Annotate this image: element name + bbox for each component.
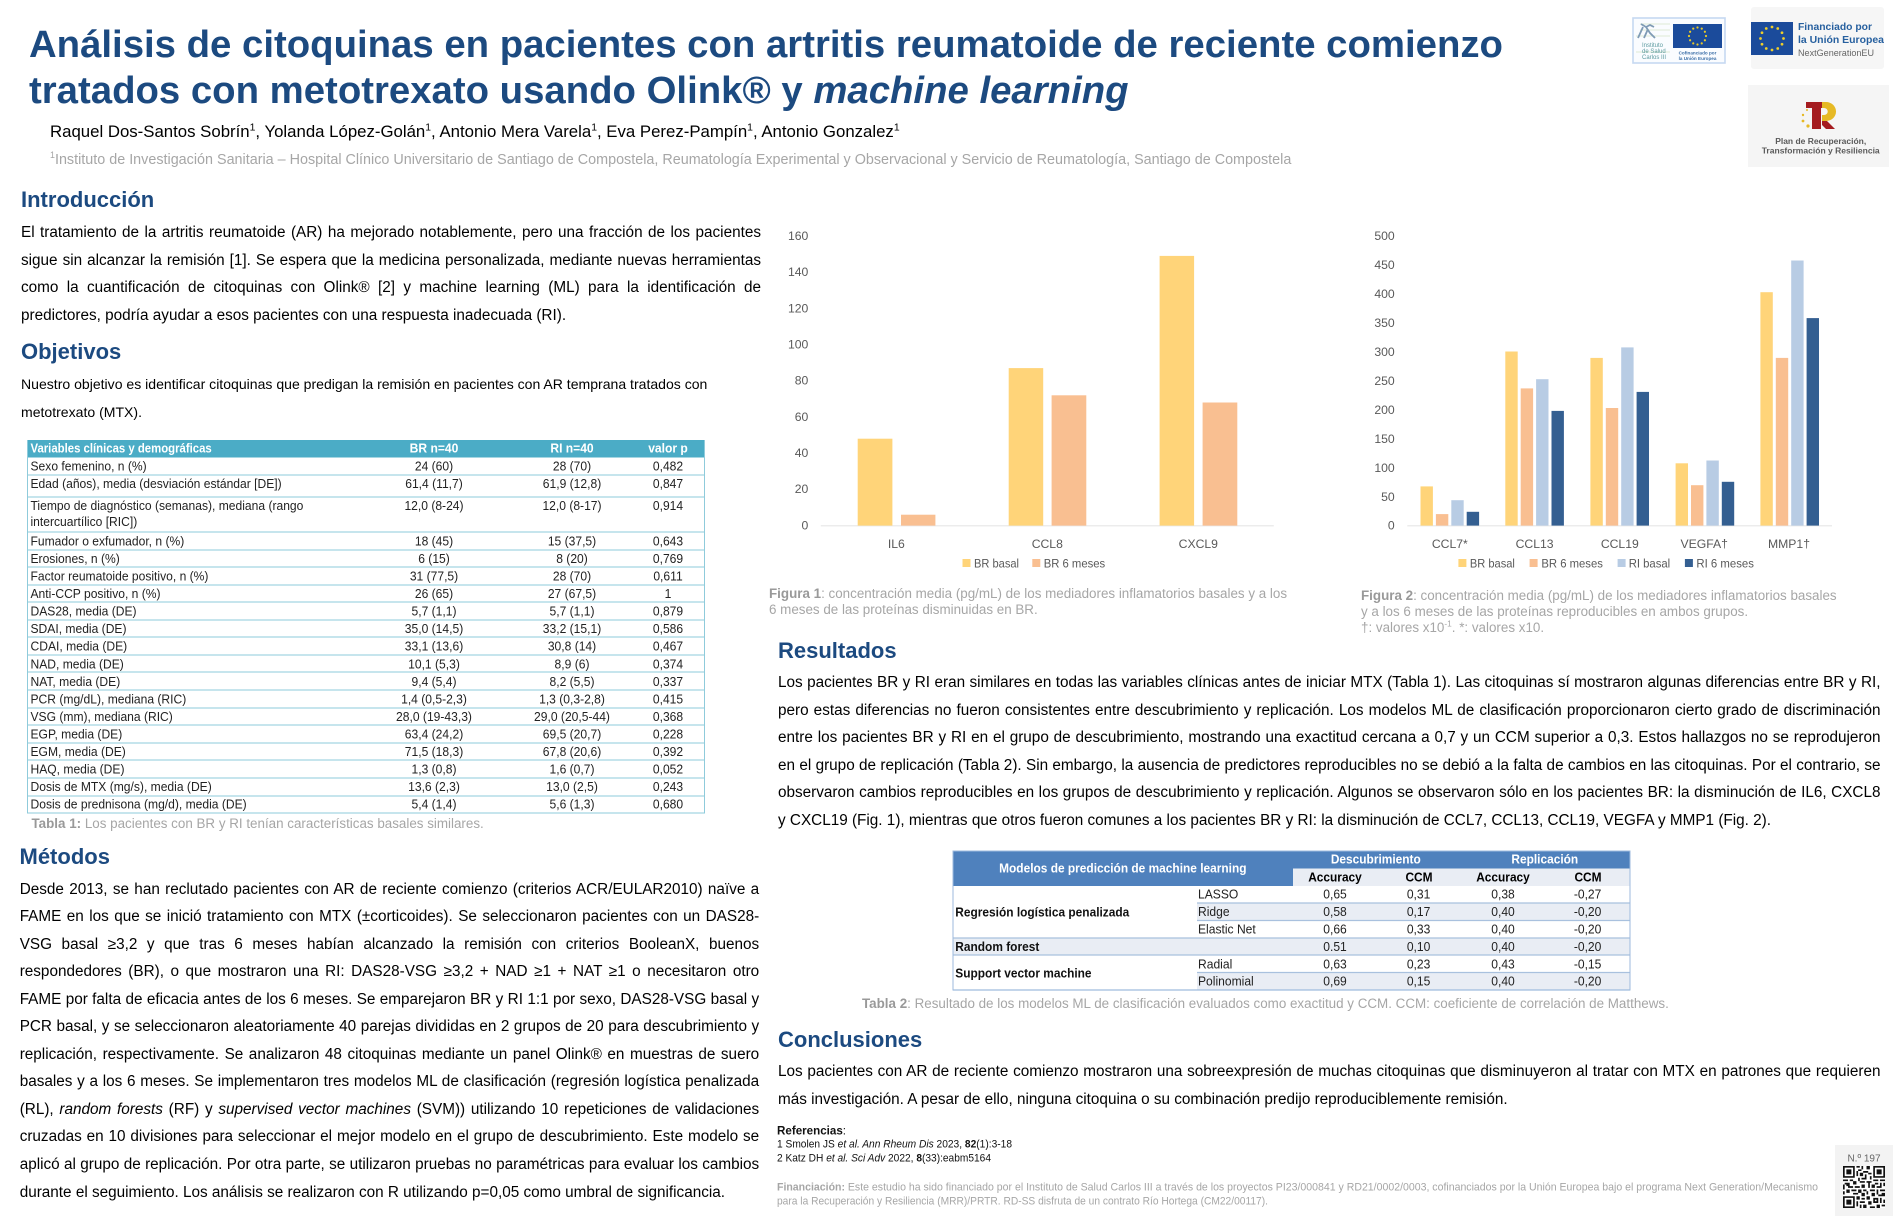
column: RI n=40: 5,6 (1,3) [549,797,595,812]
text: objetivos: metotrexato (MTX). [21,404,142,420]
column: variables: NAT, media (DE) [30,675,120,689]
icon: QR code [1843,1166,1885,1208]
row labels: variantes: LASSO [1198,887,1239,901]
caption: tabla 2: Tabla 2: Resultado de los modelos ML de clasificación evaluados como exactitud y CCM. CCM: coeficiente de correlación de Matthews. [862,996,1669,1011]
column: RI n=40 [534,441,610,812]
heading: Objetivos: Objetivos [21,339,121,364]
category labels: CCL7* [1432,537,1468,551]
y axis labels: 50 [1381,490,1395,504]
column: valor p: 0,243 [653,780,683,794]
text: métodos: respondedores (BR), o que mostraron una RI: DAS28-VSG ≥3,2 + NAD ≥1 + NAT ≥1 o necesitaron otro [20,963,759,980]
column: accuracy replicación: 0,40 [1491,922,1515,936]
category labels: CCL19 [1601,537,1639,551]
category labels [1432,537,1810,551]
column: accuracy descubrimiento: 0,69 [1323,974,1347,988]
column: valor p: 1 [665,587,671,601]
column: RI n=40: 1,6 (0,7) [549,762,595,777]
column: RI n=40: RI n=40 [550,441,594,456]
funding note [777,1182,1818,1208]
row labels: variantes: Ridge [1198,904,1230,919]
text: introducción [21,224,761,324]
column: CCM replicación: -0,27 [1574,887,1601,901]
column: valor p: 0,467 [653,639,683,654]
references: 1 Smolen JS et al. Ann Rheum Dis 2023, 82(1):3-18 [777,1138,1012,1150]
text: resultados: y CXCL19 (Fig. 1), mientras que otros fueron comunes a los pacientes BR y RI: la disminución de CCL7, CCL13, CCL19, VEGFA y MMP1 (Fig. 2). [778,812,1771,829]
column: valor p: 0,586 [653,622,683,636]
column: accuracy descubrimiento: 0.51 [1323,939,1347,954]
series: RI 6 meses [1467,318,1819,526]
column: RI n=40: 5,7 (1,1) [549,604,595,619]
logo: Instituto de Salud Carlos III cofinanciado UE: Cofinanciado por [1679,50,1717,56]
column: BR n=40: 13,6 (2,3) [408,780,460,794]
y axis labels: 450 [1374,258,1395,272]
title: tratados con metotrexato usando Olink® y machine learning [29,69,1129,112]
column: BR n=40: 12,0 (8-24) [404,499,464,513]
table header: Modelos de predicción de machine learning [999,861,1246,875]
text: resultados: en el grupo de replicación (Tabla 2). Sin embargo, la ausencia de predictores reproducibles no se debió a la falta de cambios en las citoquinas. Por el contrario, se [778,757,1880,774]
column: CCM replicación: -0,20 [1574,939,1601,954]
column: RI n=40: 15 (37,5) [548,534,596,549]
funding note: Financiación: Este estudio ha sido financiado por el Instituto de Salud Carlos III a través de los proyectos PI23/000841 y RD21/0002/0003, cofinanciados por la Unión Europea bajo el programa Next Generation/Mecanismo [777,1182,1818,1194]
caption: tabla 1: Tabla 1: Los pacientes con BR y RI tenían características basales similares. [32,816,484,830]
column: RI n=40: 27 (67,5) [548,587,596,601]
text: resultados: observaron cambios reproducibles en los grupos de descubrimiento y replicación. Algunos se observaron sólo en los pacientes BR: la disminución de IL6, CXCL8 [778,784,1880,801]
column: accuracy replicación: 0,40 [1491,974,1515,988]
y axis labels: 100 [788,338,809,352]
column: CCM descubrimiento: 0,33 [1407,922,1430,936]
column: BR n=40: 33,1 (13,6) [405,639,463,654]
column: valor p: 0,415 [653,692,683,707]
text: métodos: Desde 2013, se han reclutado pacientes con AR de reciente comienzo (criterios ACR/EULAR2010) naïve a [20,880,759,898]
column: valor p: valor p [648,441,688,456]
category labels: VEGFA† [1680,537,1728,551]
funding note: para la Recuperación y Resiliencia (MRR)/PRTR. RD-SS disfruta de un contrato Río Hortega (CM22/00117). [777,1196,1268,1208]
column: variables: Fumador o exfumador, n (%) [30,534,184,549]
text: métodos: PCR basal, y se seleccionaron aleatoriamente 40 parejas divididas en 2 grupos de 20 para descubrimiento y [20,1018,759,1035]
row labels: variantes: Elastic Net [1198,922,1256,936]
row labels: variantes: Radial [1198,957,1232,971]
row labels: modelos [955,905,1129,980]
caption: figura 2: Figura 2: concentración media (pg/mL) de los mediadores inflamatorios basales [1361,588,1837,603]
column: BR n=40: 9,4 (5,4) [411,675,457,689]
legend: BR 6 meses [1044,556,1105,570]
text: métodos: FAME por falta de eficacia antes de los 6 meses. Se emparejaron BR y RI 1:1 por sexo, DAS28-VSG basal y [20,991,759,1008]
legend: BR basal [1470,556,1515,570]
text: métodos: replicación, respectivamente. Se analizaron 48 citoquinas mediante un panel Olink® en muestras de suero [20,1046,759,1063]
series: RI basal [1451,260,1804,526]
column: CCM replicación: -0,20 [1574,904,1601,919]
column: RI n=40: 12,0 (8-17) [542,499,602,513]
heading: Conclusiones: Conclusiones [778,1027,922,1052]
text: introducción: como la cuantificación de citoquinas con Olink® [2] y machine learning (ML) para la identificación de [21,279,761,296]
column: BR n=40: 63,4 (24,2) [405,727,463,742]
logo: Instituto de Salud Carlos III cofinanciado UE [1633,18,1725,63]
column: accuracy descubrimiento: 0,63 [1323,957,1347,971]
table header: Descubrimiento [1331,852,1421,866]
column: valor p: 0,052 [653,762,683,777]
column: accuracy replicación: 0,40 [1491,904,1515,919]
legend [1458,556,1754,570]
column: RI n=40: 33,2 (15,1) [543,622,601,636]
logo: Financiado por la Unión Europea: Financiado por [1798,22,1872,33]
y axis labels: 200 [1374,403,1395,417]
column: accuracy replicación: 0,38 [1491,887,1515,901]
column: BR n=40: 5,7 (1,1) [411,604,457,619]
y axis labels: 80 [795,374,809,388]
y axis labels: 0 [1388,518,1395,532]
text: objetivos [21,376,707,420]
column: BR n=40: 28,0 (19-43,3) [396,710,472,724]
column: variables: Erosiones, n (%) [30,552,120,566]
column: variables: Edad (años), media (desviación estándar [DE]) [30,477,282,491]
column: CCM descubrimiento: 0,15 [1407,974,1430,988]
series: BR 6 meses [1436,358,1788,526]
column: CCM descubrimiento: 0,23 [1407,957,1430,971]
text: resultados: Los pacientes BR y RI eran similares en todas las variables clínicas antes de iniciar MTX (Tabla 1). Las citoquinas sí mostraron algunas diferencias entre BR y RI, [778,674,1880,691]
column: accuracy replicación [1491,887,1515,988]
row labels: modelos: Regresión logística penalizada [955,905,1129,919]
heading: Resultados: Resultados [778,638,897,663]
column: RI n=40: 8,2 (5,5) [549,675,595,689]
column: variables: EGP, media (DE) [30,727,122,742]
column: variables: Factor reumatoide positivo, n (%) [30,569,208,584]
text: resultados: pero estas diferencias no fueron consistentes entre descubrimiento y replicación. Los modelos ML de clasificación proporcionaron cierto grado de discriminación [778,702,1880,719]
text: métodos: (RL), random forests (RF) y supervised vector machines (SVM)) utilizando 10 repeticiones de validaciones [20,1101,759,1118]
column: valor p: 0,228 [653,727,683,742]
row labels: modelos: Support vector machine [955,966,1092,980]
text: introducción: sigue sin alcanzar la remisión [1]. Se espera que la medicina personalizada, mediante nuevas herramientas [21,252,761,269]
references: 2 Katz DH et al. Sci Adv 2022, 8(33):eabm5164 [777,1152,991,1164]
text: conclusiones [778,1063,1880,1108]
column: variables: SDAI, media (DE) [30,622,127,636]
table 2: modelos de machine learning [952,850,1630,991]
column: variables: intercuartílico [RIC]) [30,515,137,529]
table header: Accuracy [1476,870,1530,884]
logo: Financiado por la Unión Europea: la Unión Europea [1798,35,1884,46]
category labels: CCL13 [1516,537,1554,551]
column: BR n=40: 6 (15) [418,552,450,566]
column: RI n=40: 61,9 (12,8) [543,477,601,491]
column: variables: DAS28, media (DE) [30,604,137,619]
category labels: CCL8 [1032,537,1063,551]
series: BR basal [1420,292,1773,526]
text: introducción: predictores, podría ayudar a esos pacientes con una respuesta inadecuada (RI). [21,307,566,324]
column: valor p: 0,611 [653,569,683,584]
text: métodos: durante el seguimiento. Los análisis se realizaron con R utilizando p=0,05 como umbral de significancia. [20,1184,725,1201]
column: BR n=40: BR n=40 [410,441,458,456]
column: valor p: 0,482 [653,459,683,474]
column: BR n=40: 61,4 (11,7) [405,477,463,491]
column: RI n=40: 8,9 (6) [555,657,589,672]
text: conclusiones: Los pacientes con AR de reciente comienzo mostraron una sobreexpresión de muchas citoquinas que disminuyeron al tratar con MTX en patrones que requieren [778,1063,1880,1080]
category labels: IL6 [888,537,905,551]
column: accuracy descubrimiento [1323,887,1347,988]
affiliation: 1Instituto de Investigación Sanitaria – Hospital Clínico Universitario de Santiago de Compostela, Reumatología Experimental y Observacional y Servicio de Reumatología, Santiago de Compostela [50,150,1291,168]
y axis labels: 20 [795,482,809,496]
column: variables: EGM, media (DE) [30,745,126,759]
text: resultados [778,674,1880,829]
legend: RI 6 meses [1696,556,1754,570]
y axis labels: 250 [1374,374,1395,388]
column: RI n=40: 1,3 (0,3-2,8) [539,692,605,707]
y axis labels: 120 [788,302,809,316]
column: accuracy replicación: 0,43 [1491,957,1515,971]
QR panel [1835,1145,1893,1216]
column: CCM descubrimiento: 0,10 [1407,939,1430,954]
column: RI n=40: 8 (20) [556,552,588,566]
text: métodos: cruzadas en 10 divisiones para seleccionar el mejor modelo en el grupo de descubrimiento. Este modelo se [20,1128,759,1145]
column: BR n=40: 71,5 (18,3) [405,745,463,759]
row labels: variantes: Polinomial [1198,974,1254,988]
references [777,1124,1012,1164]
bar chart: figura 1 [788,229,1274,570]
category labels: MMP1† [1768,537,1810,551]
text: métodos: aplicó al grupo de replicación. Por otra parte, se utilizaron pruebas no paramétricas para evaluar los cambios [20,1156,759,1173]
column: valor p: 0,680 [653,797,683,812]
y axis labels: 300 [1374,345,1395,359]
column: valor p: 0,368 [653,710,683,724]
title [29,23,1503,112]
column: variables: Dosis de MTX (mg/s), media (DE) [30,780,212,794]
column: CCM replicación: -0,20 [1574,974,1601,988]
column: accuracy descubrimiento: 0,66 [1323,922,1347,936]
column: valor p: 0,847 [653,477,683,491]
column: RI n=40: 28 (70) [553,569,591,584]
column: variables: NAD, media (DE) [30,657,124,672]
authors: Raquel Dos-Santos Sobrín1, Yolanda López-Golán1, Antonio Mera Varela1, Eva Perez-Pampín1, Antonio Gonzalez1 [50,122,900,140]
column: CCM replicación [1574,887,1601,988]
text: métodos [20,880,760,1201]
references: Referencias: [777,1124,846,1138]
column: RI n=40: 29,0 (20,5-44) [534,710,610,724]
text: objetivos: Nuestro objetivo es identificar citoquinas que predigan la remisión en pacientes con AR temprana tratados con [21,376,707,392]
category labels [888,537,1218,551]
column: variables: PCR (mg/dL), mediana (RIC) [30,692,186,707]
column: BR n=40: 31 (77,5) [410,569,458,584]
table header: Accuracy [1308,870,1362,884]
column: accuracy descubrimiento: 0,58 [1323,904,1347,919]
column: CCM replicación: -0,15 [1574,957,1601,971]
column: variables: CDAI, media (DE) [30,639,127,654]
logo: Instituto de Salud Carlos III cofinanciado UE: Carlos III [1642,55,1666,61]
column: BR n=40: 5,4 (1,4) [411,797,457,812]
legend: BR basal [974,556,1019,570]
heading: Métodos: Métodos [20,844,110,869]
series: BR basal [858,256,1194,526]
column: RI n=40: 13,0 (2,5) [546,780,598,794]
column: BR n=40 [396,441,472,812]
caption: figura 1: 6 meses de las proteínas disminuidas en BR. [769,602,1038,617]
column: valor p: 0,374 [653,657,683,672]
column: valor p: 0,914 [653,499,683,513]
logo: Plan de Recuperación: Plan de Recuperación, [1775,136,1866,146]
y axis labels: 500 [1374,229,1395,243]
column: RI n=40: 69,5 (20,7) [543,727,601,742]
column: RI n=40: 67,8 (20,6) [543,745,601,759]
text: conclusiones: más investigación. A pesar de ello, ninguna citoquina o su combinación predijo reproduciblemente remisión. [778,1091,1508,1108]
column: BR n=40: 1,3 (0,8) [411,762,457,777]
legend [962,556,1105,570]
logo: Plan de Recuperación [1748,85,1889,167]
text: resultados: entre los pacientes BR y RI en el grupo de descubrimiento, mostrando una exactitud cercana a 0,7 y un CCM superior a 0,3. Estos hallazgos no se reprodujeron [778,729,1880,746]
table header: CCM [1574,870,1602,884]
heading: Introducción: Introducción [21,187,154,212]
logos [1632,7,1889,167]
table header: CCM [1405,870,1433,884]
text: introducción: El tratamiento de la artritis reumatoide (AR) ha mejorado notablemente, pero una fracción de los pacientes [21,224,761,241]
column: CCM descubrimiento: 0,17 [1407,904,1430,919]
y axis labels: 400 [1374,287,1395,301]
column: valor p: 0,337 [653,675,683,689]
column: variables: HAQ, media (DE) [30,762,124,777]
column: RI n=40: 28 (70) [553,459,591,474]
y axis labels: 100 [1374,461,1395,475]
y axis labels: 350 [1374,316,1395,330]
text: métodos: VSG basal ≥3,2 y que tras 6 meses habían alcanzado la remisión con criterios BooleanX, buenos [20,936,759,953]
column: CCM descubrimiento [1407,887,1430,988]
y axis labels: 160 [788,229,809,243]
y axis labels [1374,229,1395,532]
column: variables: VSG (mm), mediana (RIC) [30,710,173,724]
caption: figura 2: †: valores x10-1. *: valores x10. [1361,619,1544,635]
logo: Instituto de Salud Carlos III cofinanciado UE: Instituto [1642,43,1664,49]
y axis labels: 40 [795,446,809,460]
column: valor p [648,441,688,812]
column: BR n=40: 24 (60) [415,459,453,474]
column: CCM descubrimiento: 0,31 [1407,887,1430,901]
column: valor p: 0,643 [653,534,683,549]
logo: Instituto de Salud Carlos III cofinanciado UE: la Unión Europea [1679,56,1717,61]
column: valor p: 0,879 [653,604,683,619]
column: variables: Tiempo de diagnóstico (semanas), mediana (rango [30,499,303,513]
table header: Replicación [1511,852,1578,866]
column: variables: Sexo femenino, n (%) [30,459,147,474]
column: BR n=40: 35,0 (14,5) [405,622,463,636]
row labels: modelos: Random forest [955,939,1039,954]
title: Análisis de citoquinas en pacientes con artritis reumatoide de reciente comienzo [29,23,1503,66]
caption: figura 2: y a los 6 meses de las proteínas reproducibles en ambos grupos. [1361,604,1748,619]
column: BR n=40: 1,4 (0,5-2,3) [401,692,467,707]
caption: figura 1 [769,586,1287,617]
y axis labels: 150 [1374,432,1395,446]
category labels: CXCL9 [1179,537,1218,551]
text: métodos: FAME en los que se inició tratamiento con MTX (±corticoides). Se seleccionaron pacientes con un DAS28- [20,908,759,925]
legend: RI basal [1629,556,1670,570]
row labels: variantes [1198,887,1256,988]
column: variables: Variables clínicas y demográficas [30,441,212,456]
column: BR n=40: 26 (65) [415,587,453,601]
caption: figura 2 [1361,588,1837,635]
column: valor p: 0,392 [653,745,683,759]
y axis labels: 140 [788,265,809,279]
column: accuracy replicación: 0,40 [1491,939,1515,954]
column: valor p: 0,769 [653,552,683,566]
column: variables: Dosis de prednisona (mg/d), media (DE) [30,797,247,812]
y axis labels [788,229,809,532]
table 1: características basales [27,440,705,814]
column: variables [30,441,303,812]
logo: Financiado por la Unión Europea: NextGenerationEU [1798,48,1874,59]
column: BR n=40: 10,1 (5,3) [408,657,460,672]
poster number: N.º 197 [1847,1154,1881,1164]
bar chart: figura 2 [1374,229,1832,570]
column: CCM replicación: -0,20 [1574,922,1601,936]
logo: Financiado por la Unión Europea [1751,7,1884,69]
y axis labels: 0 [802,518,809,532]
text: métodos: basales y a los 6 meses. Se implementaron tres modelos ML de clasificación (regresión logística penalizada [20,1073,759,1090]
column: variables: Anti-CCP positivo, n (%) [30,587,161,601]
column: RI n=40: 30,8 (14) [548,639,596,654]
caption: figura 1: Figura 1: concentración media (pg/mL) de los mediadores inflamatorios basales y a los [769,586,1287,601]
column: accuracy descubrimiento: 0,65 [1323,887,1347,901]
series: BR 6 meses [901,395,1237,526]
logo: Plan de Recuperación: Transformación y Resiliencia [1762,146,1880,156]
column: BR n=40: 18 (45) [415,534,453,549]
legend: BR 6 meses [1541,556,1603,570]
table header [999,852,1602,884]
y axis labels: 60 [795,410,809,424]
logo: Instituto de Salud Carlos III cofinanciado UE: de Salud [1642,49,1666,55]
